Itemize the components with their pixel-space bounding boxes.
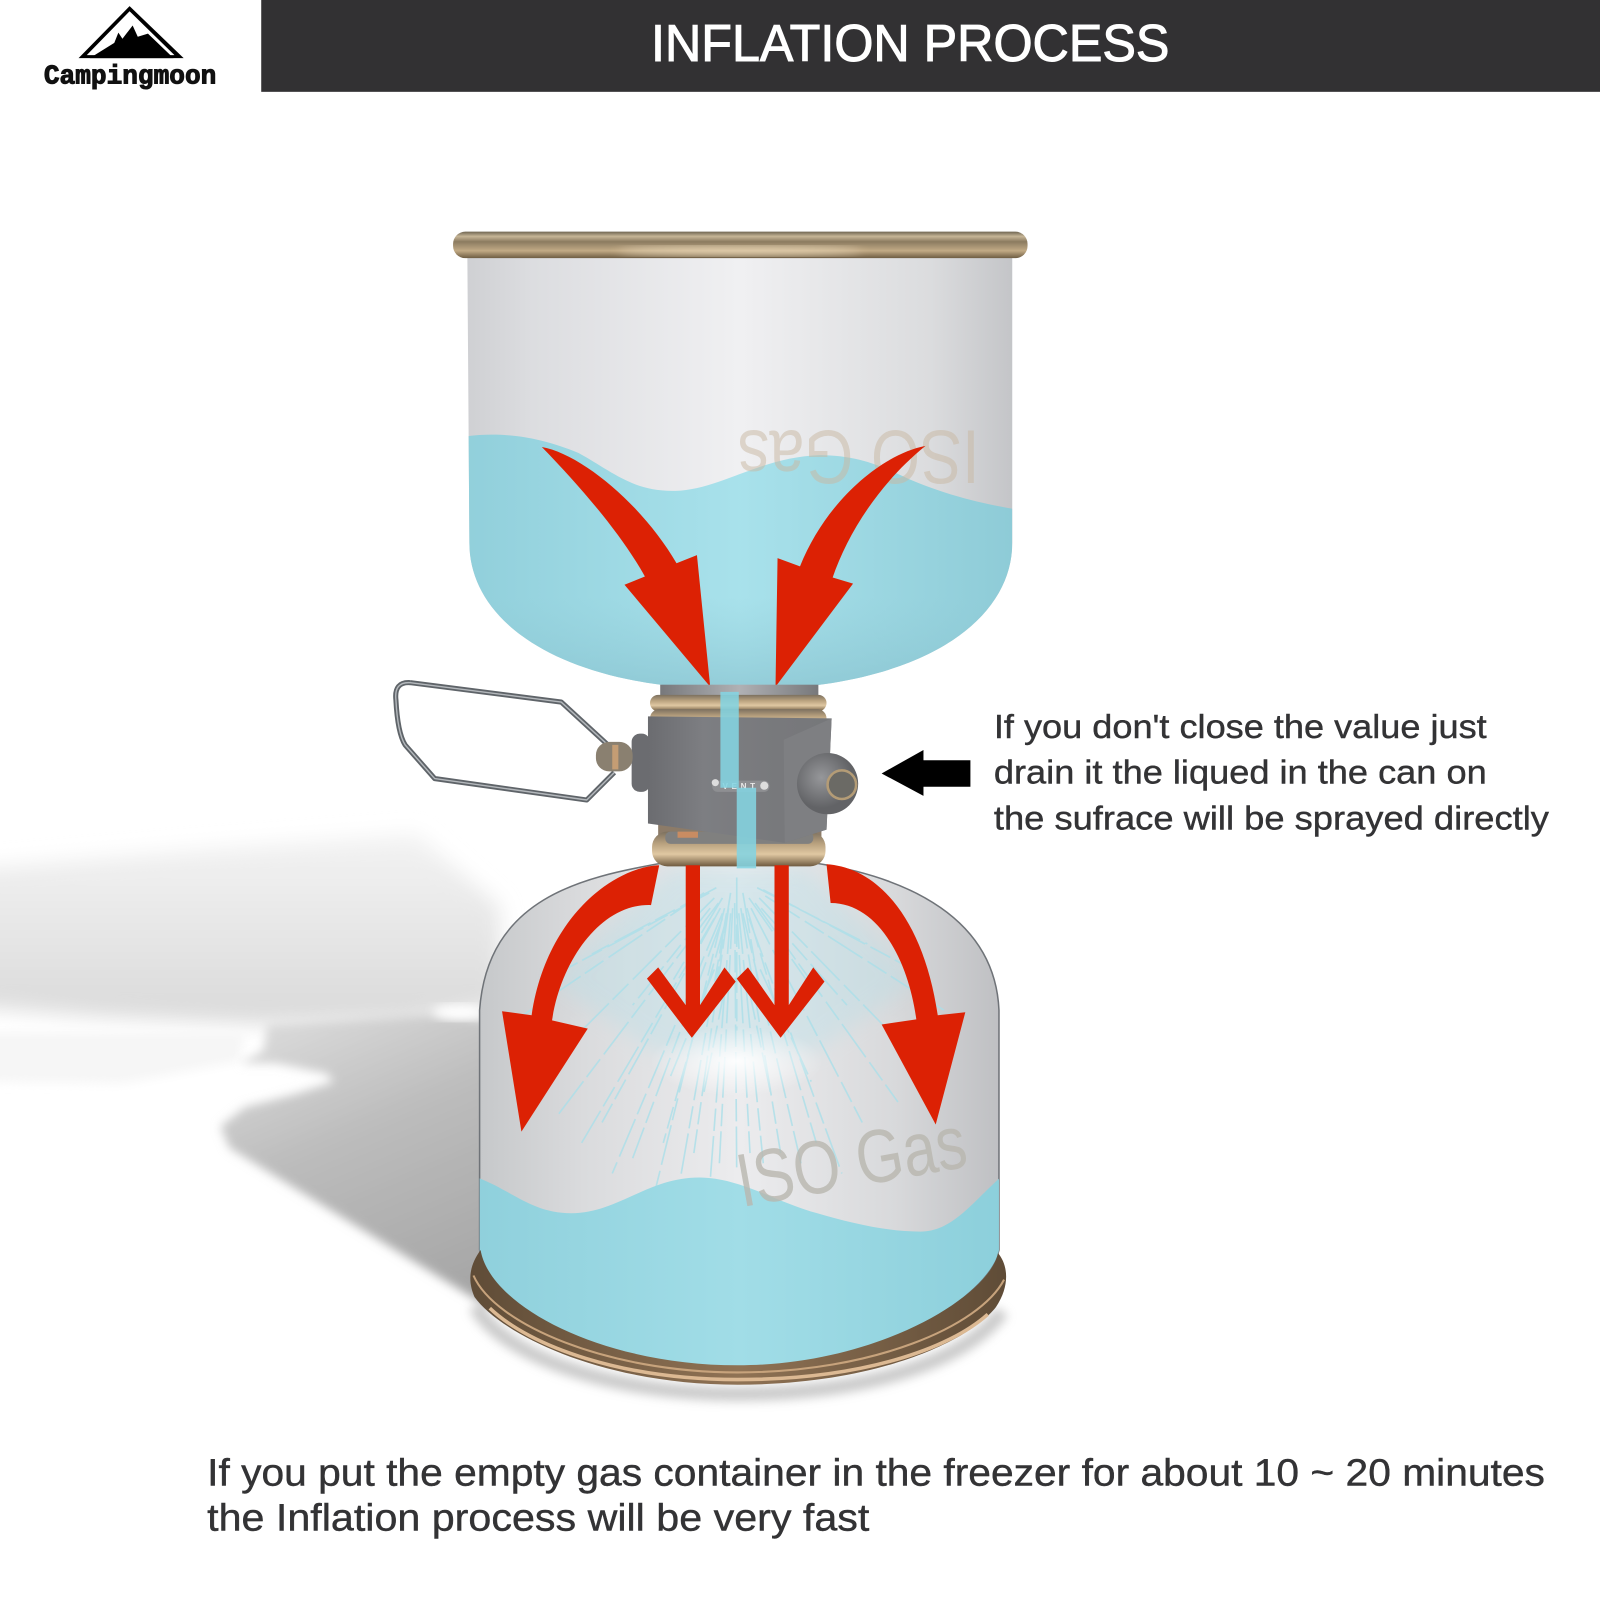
regulator knob (797, 753, 858, 814)
callout text: valve: If you don't close the value just (994, 709, 1487, 746)
cast shadow (0, 834, 1002, 1394)
bottom brass ring (652, 824, 826, 866)
logo: Campingmoon: Campingmoon (44, 62, 216, 92)
red arrows: lower can (502, 864, 965, 1132)
base rim (470, 1250, 1006, 1385)
handle wire (396, 683, 614, 800)
spray (515, 867, 944, 1199)
valve block (648, 716, 832, 843)
bottom note text: If you put the empty gas container in the freezer for about 10 ~ 20 minutes (207, 1452, 1545, 1494)
bottom note text (207, 1452, 1545, 1539)
neck (660, 685, 818, 709)
callout text: valve (994, 709, 1549, 838)
red arrows: upper can (542, 446, 926, 687)
VENT plate: VENT (722, 782, 755, 791)
top rim (453, 232, 1028, 258)
gas valve (396, 683, 858, 868)
can body (480, 863, 999, 1367)
bottom note text: the Inflation process will be very fast (207, 1497, 870, 1539)
top brass ring (650, 695, 827, 730)
handle knob (596, 734, 650, 792)
title: INFLATION PROCESS (651, 15, 1169, 73)
can body (467, 255, 1012, 690)
liquid stream (720, 692, 756, 868)
mirrored ISO Gas label: ISO Gas (738, 414, 980, 499)
upper inverted gas can (453, 232, 1028, 704)
header bar (261, 0, 1600, 92)
water in upper can (464, 435, 1015, 704)
callout text: valve: the sufrace will be sprayed directly (994, 801, 1549, 838)
ISO Gas label: ISO Gas (730, 1100, 973, 1224)
logo: Campingmoon (44, 6, 216, 92)
lower gas can (470, 863, 1006, 1385)
black arrow pointing at valve (882, 750, 970, 796)
VENT plate (712, 779, 769, 792)
callout text: valve: drain it the liqued in the can on (994, 755, 1487, 792)
water in lower can (474, 1173, 1005, 1372)
